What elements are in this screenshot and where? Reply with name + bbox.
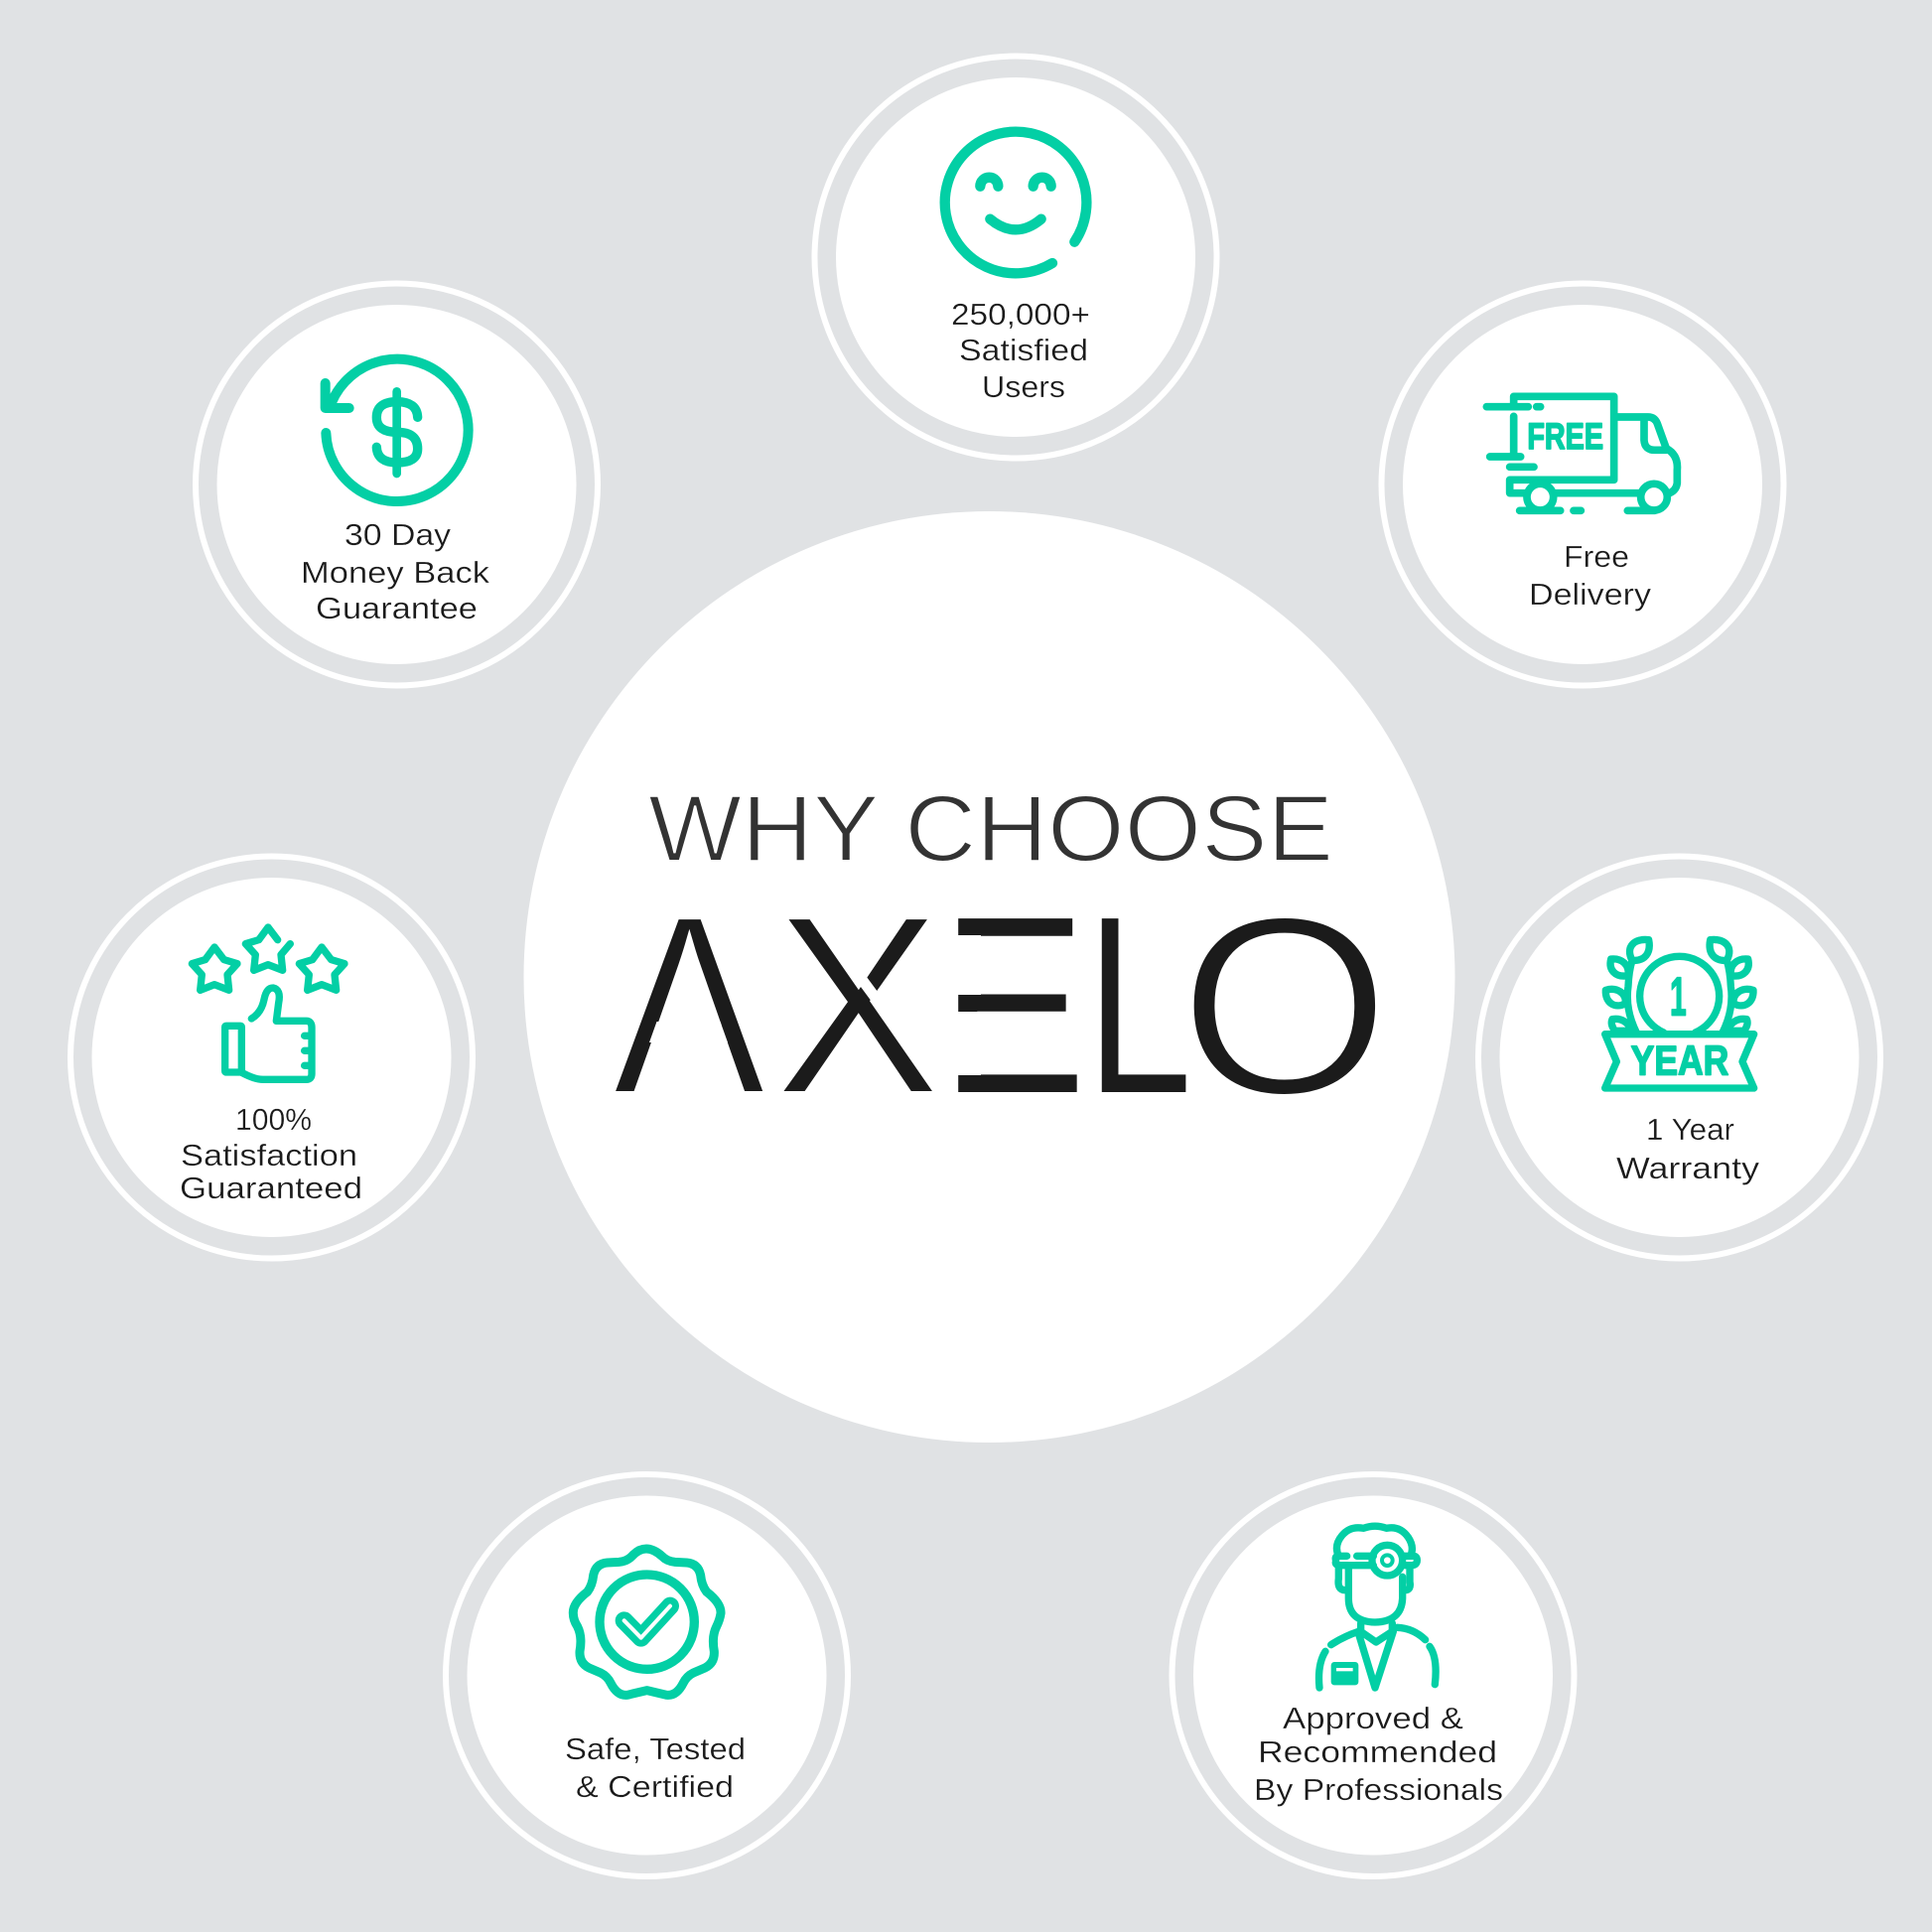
logo wordmark: AXELO: A [613, 863, 765, 1148]
label: free delivery [1529, 539, 1652, 612]
panel: satisfied users [814, 56, 1217, 459]
icon: certified seal with check [573, 1549, 721, 1695]
icon: dollar with return arrow [326, 359, 469, 501]
label: 250,000+ satisfied users: Satisfied [959, 333, 1088, 367]
icon: laurel medal with year ribbon: YEAR [1631, 1037, 1728, 1084]
heading: why choose: WHY CHOOSE [648, 776, 1333, 882]
icon: thumbs up with stars [192, 927, 345, 1079]
label: free delivery: Delivery [1529, 577, 1652, 612]
icon: smiley face [945, 132, 1086, 273]
panel: money back guarantee [196, 284, 598, 685]
panel: approved by professionals [1172, 1474, 1575, 1876]
label: safe tested and certified: Safe, Tested [565, 1731, 746, 1766]
badge circle [814, 56, 1217, 459]
label: 30 day money back guarantee: Money Back [301, 555, 490, 590]
label: approved and recommended by professionals [1254, 1701, 1503, 1807]
label: 100% satisfaction guaranteed: Guaranteed [180, 1171, 362, 1205]
logo wordmark: AXELO: L [1085, 863, 1193, 1148]
label: 1 year warranty: Warranty [1616, 1151, 1760, 1185]
label: free delivery: Free [1564, 539, 1629, 574]
logo wordmark: AXELO: O [1178, 864, 1391, 1149]
badge circle [196, 284, 598, 685]
label: safe tested and certified [565, 1731, 746, 1804]
logo wordmark: AXELO [613, 863, 1391, 1149]
label: 250,000+ satisfied users: 250,000+ [951, 297, 1090, 332]
panel: 1 year warranty [1478, 856, 1880, 1259]
icon: delivery truck: FREE [1527, 416, 1603, 457]
badge circle [1478, 856, 1880, 1259]
logo wordmark: AXELO: X [774, 863, 941, 1148]
label: 250,000+ satisfied users [951, 297, 1090, 404]
label: 30 day money back guarantee [301, 517, 490, 625]
badge circle [1382, 284, 1783, 685]
label: approved and recommended by professionals: Recommended [1258, 1734, 1497, 1769]
logo wordmark: AXELO: E [939, 863, 1087, 1148]
label: 100% satisfaction guaranteed [180, 1102, 362, 1205]
badge circle [70, 856, 473, 1259]
icon: doctor with head mirror [1318, 1526, 1436, 1688]
panel: 100% satisfaction [70, 856, 473, 1259]
label: approved and recommended by professionals: Approved & [1283, 1701, 1463, 1735]
label: 1 year warranty [1616, 1112, 1760, 1185]
label: 30 day money back guarantee: 30 Day [345, 517, 452, 552]
badge circle [1172, 1474, 1575, 1876]
label: 100% satisfaction guaranteed: 100% [235, 1102, 312, 1137]
label: 1 year warranty: 1 Year [1646, 1112, 1734, 1147]
central white circle [524, 511, 1455, 1443]
panel: free delivery [1382, 284, 1783, 685]
panel: safe tested certified [446, 1474, 848, 1876]
icon: laurel medal with year ribbon: 1 [1670, 967, 1687, 1028]
icon: delivery truck [1486, 396, 1677, 510]
icon: laurel medal with year ribbon [1605, 939, 1754, 1088]
label: approved and recommended by professionals: By Professionals [1254, 1772, 1503, 1807]
label: safe tested and certified: & Certified [576, 1769, 734, 1804]
label: 100% satisfaction guaranteed: Satisfaction [181, 1138, 357, 1173]
badge circle [446, 1474, 848, 1876]
label: 30 day money back guarantee: Guarantee [316, 591, 478, 625]
label: 250,000+ satisfied users: Users [982, 369, 1065, 404]
